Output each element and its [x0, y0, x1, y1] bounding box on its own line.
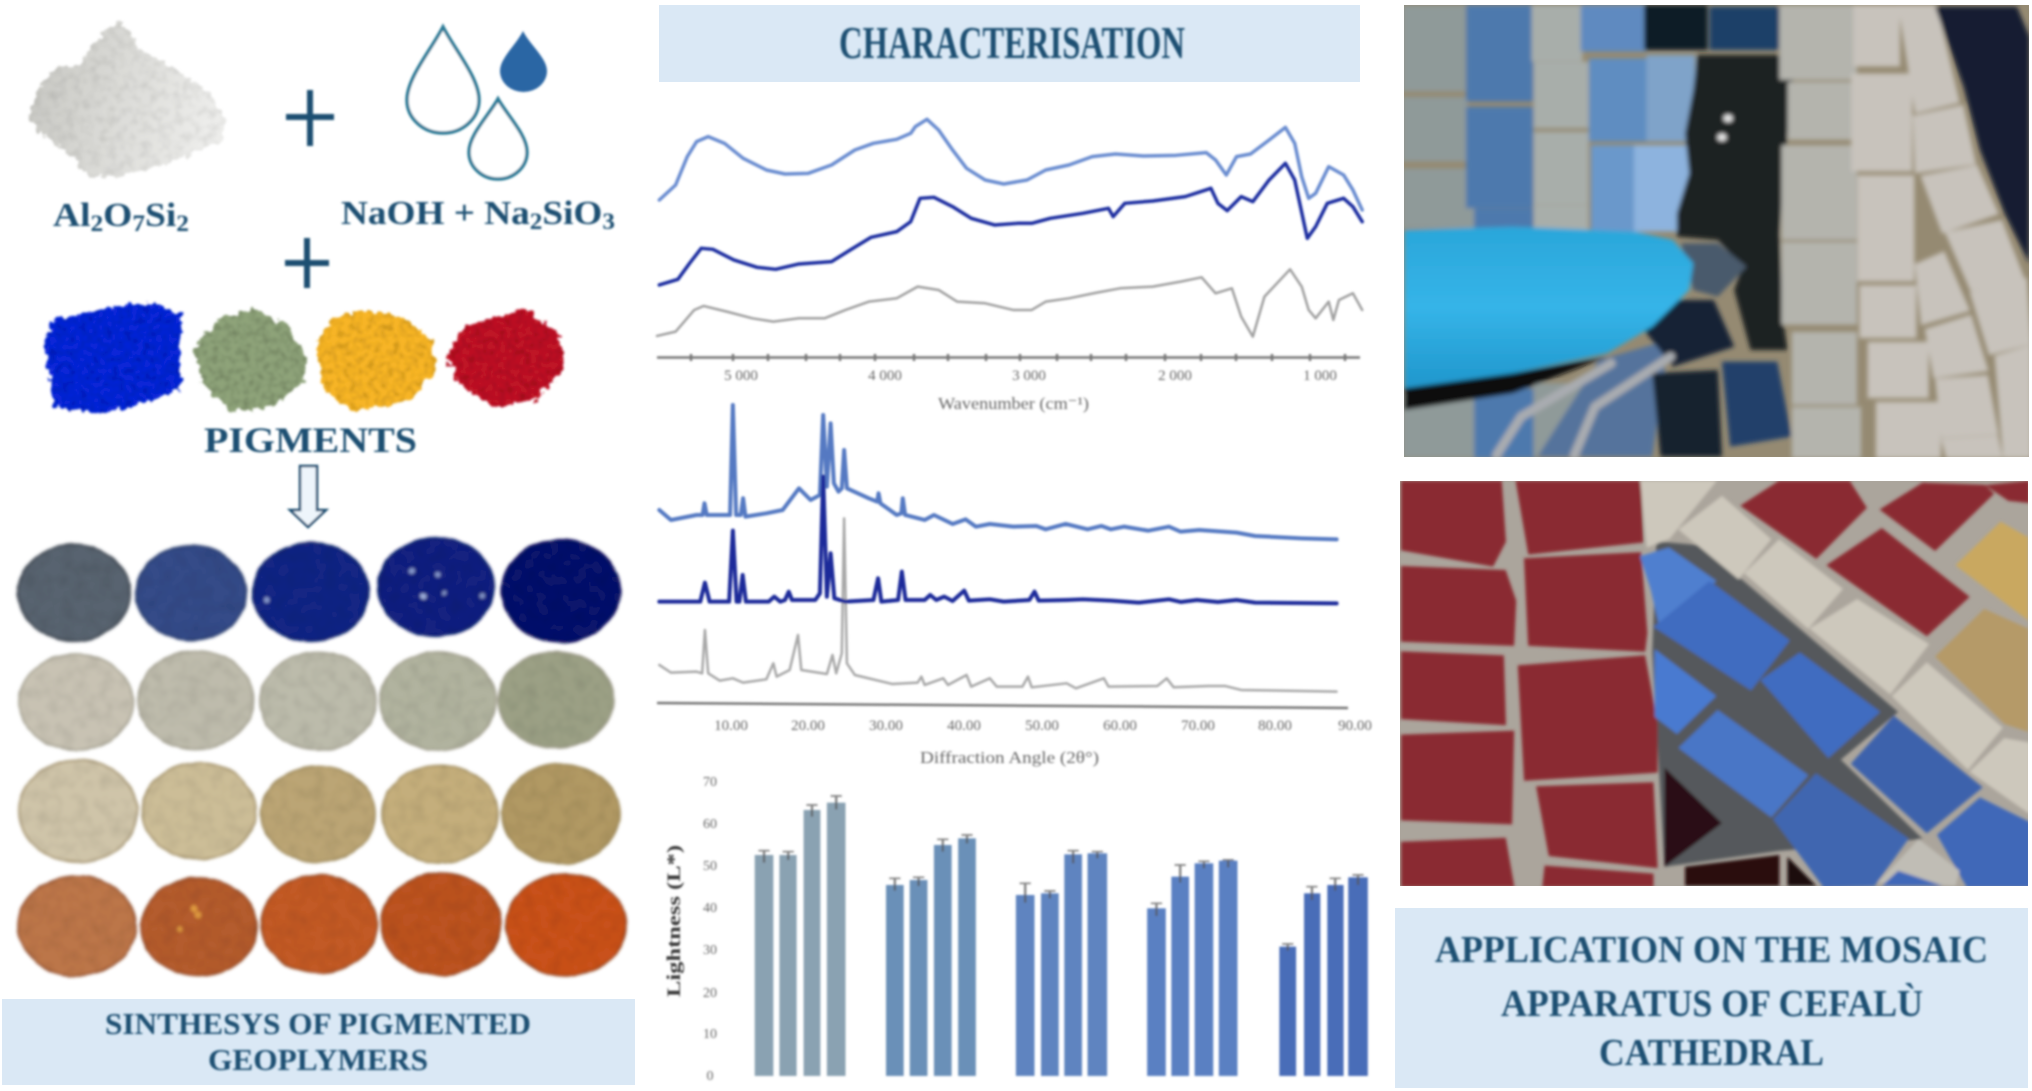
label: NaOH + Na2SiO3: NaOH + Na — [341, 195, 513, 232]
arrow: hollow down arrow — [290, 466, 326, 527]
bars with error markers — [755, 796, 1368, 1076]
banner: application heading: APPLICATION ON THE MOSAIC — [1435, 929, 1988, 971]
banner: synthesis heading — [2, 999, 635, 1085]
XRD tick labels: 20.00 — [791, 718, 825, 734]
XRD tick labels: 80.00 — [1258, 718, 1292, 734]
FTIR tick labels: 3 000 — [1012, 368, 1046, 384]
y axis tick labels: 10 — [703, 1027, 717, 1042]
FTIR tick labels: 4 000 — [868, 368, 902, 384]
XRD x axis — [657, 703, 1348, 708]
icon: water drops — [407, 27, 547, 179]
FTIR axis title: Wavenumber (cm⁻¹) — [938, 394, 1089, 413]
label: Al2O7Si2: Si — [145, 197, 176, 234]
label: NaOH + Na2SiO3: SiO — [542, 195, 602, 232]
photo: Cefalù mosaic detail with red and blue tesserae — [1400, 481, 2028, 886]
chart: FTIR spectra — [657, 119, 1362, 413]
XRD tick labels: 90.00 — [1338, 718, 1372, 734]
label: NaOH + Na2SiO3: 2 — [530, 209, 542, 234]
chart: XRD diffractograms — [657, 405, 1372, 767]
banner: application heading: APPARATUS OF CEFALÙ — [1501, 983, 1923, 1025]
FTIR x axis — [657, 354, 1360, 361]
XRD curves — [659, 405, 1337, 692]
XRD tick labels: 40.00 — [947, 718, 981, 734]
y axis title: Lightness (L*) — [664, 845, 685, 997]
label: PIGMENTS: PIGMENTS — [204, 420, 417, 460]
y axis tick labels: 20 — [703, 986, 717, 1001]
plus sign 2 — [285, 238, 329, 288]
y axis tick labels: 60 — [703, 817, 717, 832]
y axis tick labels: 50 — [703, 859, 717, 874]
XRD axis title: Diffraction Angle (2θ°) — [920, 748, 1099, 767]
row 4: red-orange discs — [18, 873, 626, 976]
banner: synthesis heading: SINTHESYS OF PIGMENTED — [105, 1006, 531, 1041]
label: Al2O7Si2: O — [103, 197, 132, 234]
XRD tick labels: 70.00 — [1181, 718, 1215, 734]
label: Al2O7Si2: 2 — [90, 211, 103, 236]
photo: mosaic restoration with blue glove and tweezers — [1404, 5, 2029, 457]
XRD tick labels: 60.00 — [1103, 718, 1137, 734]
FTIR tick labels — [724, 368, 1337, 384]
banner: application heading: CATHEDRAL — [1599, 1032, 1824, 1074]
FTIR curves — [657, 119, 1362, 337]
y axis tick labels: 0 — [706, 1069, 714, 1084]
banner: characterisation heading — [659, 5, 1360, 82]
y axis tick labels: 30 — [703, 943, 717, 958]
panel: characterisation — [657, 5, 1372, 1084]
FTIR tick labels: 1 000 — [1303, 368, 1337, 384]
FTIR tick labels: 2 000 — [1158, 368, 1192, 384]
chart: lightness bar chart — [664, 775, 1368, 1084]
plus sign 1 — [286, 90, 334, 146]
label: Al2O7Si2: Al — [53, 197, 87, 234]
row 1: blue discs — [18, 538, 620, 642]
panel: synthesis of pigmented geopolymers — [2, 21, 635, 1085]
icon: four pigment powders — [46, 303, 564, 414]
banner: synthesis heading: GEOPLYMERS — [208, 1042, 428, 1077]
row 2: green-grey discs — [19, 651, 614, 750]
banner: characterisation heading: CHARACTERISATION — [839, 17, 1185, 68]
FTIR tick labels: 5 000 — [724, 368, 758, 384]
label: Al2O7Si2: 2 — [176, 211, 189, 236]
row 3: yellow-tan discs — [19, 760, 620, 864]
y axis tick labels: 40 — [703, 901, 717, 916]
grid of geopolymer sample discs — [18, 538, 626, 976]
y axis tick labels: 70 — [703, 775, 717, 790]
XRD tick labels: 10.00 — [714, 718, 748, 734]
XRD tick labels: 30.00 — [869, 718, 903, 734]
icon: white metakaolin powder — [29, 21, 225, 178]
label: Al2O7Si2: 7 — [132, 211, 145, 236]
y axis tick labels — [703, 775, 717, 1084]
XRD tick labels — [714, 718, 1372, 734]
banner: application heading — [1395, 908, 2028, 1088]
label: NaOH + Na2SiO3: 3 — [602, 209, 615, 234]
panel: application on the mosaic — [1395, 5, 2029, 1088]
XRD tick labels: 50.00 — [1025, 718, 1059, 734]
